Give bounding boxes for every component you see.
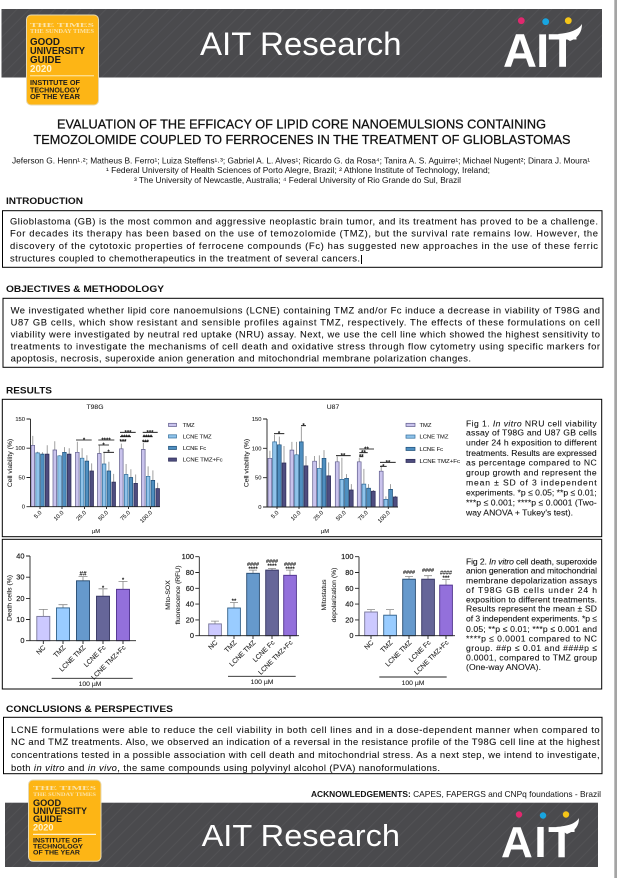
bar chart: U87: U87 xyxy=(327,404,339,411)
legend: T98G xyxy=(168,423,223,464)
bar chart: MitoSOX fluorescence: **** xyxy=(248,567,258,573)
bar chart: MitoSOX fluorescence: TMZ xyxy=(224,639,238,654)
bar chart: T98G: * xyxy=(107,450,110,456)
badge: Good University Guide (bottom): THE TIMES xyxy=(33,785,97,792)
bar chart: death cells: 30 xyxy=(16,573,24,582)
panel: objectives and methodology: treatments to investigate the mechanisms of cell death and oxidative stress through flow cytometry using specific markers for xyxy=(11,341,600,352)
panel: figure 2 xyxy=(2,539,602,689)
badge: Good University Guide (top): OF THE YEAR xyxy=(30,94,80,101)
bar chart: MitoSOX fluorescence: LCNE TMZ xyxy=(229,639,257,668)
badge: Good University Guide (bottom): GUIDE xyxy=(33,814,62,824)
panel: objectives and methodology xyxy=(3,298,603,367)
bar chart: mitostatus depolarization: 40 xyxy=(345,600,354,609)
figure 2 caption: (One-way ANOVA). xyxy=(466,662,541,672)
badge: Good University Guide (bottom): THE SUNDAY TIMES xyxy=(33,792,96,798)
badge: Good University Guide (top): UNIVERSITY xyxy=(30,46,85,57)
figure 2 caption: ****p ≤ 0.0001 compared to NC xyxy=(466,634,597,644)
bar chart: MitoSOX fluorescence: #### xyxy=(266,559,278,565)
panel: conclusions and perspectives xyxy=(4,717,602,774)
bar chart: T98G: 0 xyxy=(22,505,25,511)
bar chart: U87: * xyxy=(382,464,385,470)
bar chart: mitostatus depolarization xyxy=(321,552,455,687)
heading: results: RESULTS xyxy=(6,385,52,395)
bar chart: mitostatus depolarization: 0 xyxy=(349,631,354,640)
bar chart: T98G: *** xyxy=(142,440,150,446)
badge: Good University Guide (top): TECHNOLOGY xyxy=(30,87,80,94)
bar chart: U87: µM xyxy=(321,529,329,535)
footer banner xyxy=(5,803,598,867)
badge: Good University Guide (bottom): TECHNOLOGY xyxy=(33,844,84,850)
bar chart: U87: ** xyxy=(364,447,369,453)
badge: Good University Guide (top): INSTITUTE OF xyxy=(30,80,81,87)
bar chart: mitostatus depolarization: 80 xyxy=(345,568,354,577)
footer banner title: AIT Research xyxy=(202,818,400,853)
bar chart: U87: ** xyxy=(341,454,346,460)
legend: U87: TMZ xyxy=(420,423,432,429)
bar chart: mitostatus depolarization: *** xyxy=(442,576,450,582)
panel: objectives and methodology: We investigated whether lipid core nanoemulsions (LCNE) containing TMZ and/or Fc induce a decrease in viability of T98G and xyxy=(11,304,600,315)
badge: Good University Guide (top) xyxy=(26,15,98,105)
figure 1 caption: Fig 1. In vitro NRU cell viability xyxy=(466,418,597,428)
banner title: AIT Research xyxy=(200,26,402,62)
panel: conclusions and perspectives: LCNE formulations were able to reduce the cell viability in both cell lines and in a dose-dependent manner when compared to xyxy=(11,724,600,735)
bar chart: U87: 75.0 xyxy=(357,510,370,522)
bar chart: mitostatus depolarization: Mitostatus xyxy=(321,579,328,610)
bar chart: death cells: TMZ xyxy=(53,644,67,659)
authors and affiliations: ¹ Federal University of Health Sciences of Porto Alegre, Brazil; ² Athlone Institute of Technology, Ireland; xyxy=(106,166,490,175)
bar chart: MitoSOX fluorescence: ** xyxy=(232,599,237,605)
bar chart: U87: 150 xyxy=(252,417,262,423)
bar chart: MitoSOX fluorescence: 100 µM xyxy=(251,679,274,686)
bar chart: death cells: LCNE TMZ xyxy=(59,644,87,673)
bar chart: death cells: 10 xyxy=(16,615,24,624)
bar chart: U87: Cell viability (%) xyxy=(244,439,250,487)
bar chart: mitostatus depolarization: LCNE TMZ+Fc xyxy=(413,639,451,677)
bar chart: death cells: 100 µM xyxy=(79,681,102,688)
bar chart: U87: ** xyxy=(386,460,391,466)
bar chart: mitostatus depolarization: #### xyxy=(403,570,415,576)
bar chart: T98G: 25.0 xyxy=(76,510,88,522)
bar chart: T98G: 150 xyxy=(15,417,25,423)
bar chart: death cells: 40 xyxy=(16,552,24,560)
bar chart: T98G: µM xyxy=(92,529,100,535)
bar chart: mitostatus depolarization: 20 xyxy=(345,615,354,624)
bar chart: U87: ** xyxy=(361,451,366,457)
bar chart: T98G: T98G xyxy=(86,404,104,411)
figure 1 caption: mean ± SD of 3 independent xyxy=(466,477,597,487)
badge: Good University Guide (bottom): GOOD xyxy=(33,798,61,808)
legend: T98G: LCNE TMZ xyxy=(183,434,212,440)
title: TEMOZOLOMIDE COUPLED TO FERROCENES IN THE TREATMENT OF GLIOBLASTOMAS xyxy=(34,133,570,147)
bar chart: U87: ** xyxy=(359,455,364,461)
figure 1 caption: ***p ≤ 0.001; ****p ≤ 0.0001 (Two- xyxy=(466,497,597,507)
bar chart: mitostatus depolarization: 100 µM xyxy=(402,680,425,687)
bar chart: MitoSOX fluorescence: LCNE TMZ+Fc xyxy=(257,639,295,677)
bar chart: T98G: **** xyxy=(121,435,131,441)
bar chart: mitostatus depolarization: #### xyxy=(422,568,434,574)
authors and affiliations xyxy=(12,156,590,185)
badge: Good University Guide (bottom): OF THE YEAR xyxy=(33,850,80,856)
heading: objectives and methodology: OBJECTIVES & METHODOLOGY xyxy=(6,284,164,294)
bar chart: MitoSOX fluorescence xyxy=(165,552,299,686)
figure 2 caption: 0.05; **p ≤ 0.01; ***p ≤ 0.001 and xyxy=(466,624,597,634)
bar chart: U87: 5.0 xyxy=(270,510,280,520)
bar chart: MitoSOX fluorescence: 80 xyxy=(186,568,194,577)
bar chart: MitoSOX fluorescence: 100 xyxy=(182,552,194,561)
bar chart: U87: * xyxy=(278,432,281,438)
bar chart: mitostatus depolarization: LCNE Fc xyxy=(408,639,433,664)
bar chart: death cells: * xyxy=(102,586,105,592)
badge: Good University Guide (top): GUIDE xyxy=(30,55,61,66)
acknowledgements: ACKNOWLEDGEMENTS: CAPES, FAPERGS and CNPq foundations - Brazil xyxy=(311,790,601,799)
panel: introduction: discovery of the cytotoxic properties of ferrocene compounds (Fc) has suggested new approaches in the use of these ferric xyxy=(10,240,598,251)
legend: T98G: TMZ xyxy=(183,423,195,429)
bar chart: T98G: *** xyxy=(119,440,127,446)
figure 1 caption: as percentage compared to NC xyxy=(466,457,597,467)
figure 2 caption xyxy=(466,557,597,672)
figure 2 caption: Results represent the mean ± SD xyxy=(466,604,597,614)
bar chart: MitoSOX fluorescence: 40 xyxy=(186,600,194,609)
bar chart: mitostatus depolarization: 100 xyxy=(341,552,354,561)
bar chart: mitostatus depolarization: 60 xyxy=(345,584,354,593)
figure 2 caption: anion generation and mitochondrial xyxy=(466,566,597,576)
bar chart: MitoSOX fluorescence: NC xyxy=(208,639,219,651)
title xyxy=(34,118,570,147)
legend: U87 xyxy=(406,423,460,465)
panel: conclusions and perspectives: NC and TMZ treatments. Also, we observed an indication of a reversal in the resistance profile of the T98G cell line at the highest xyxy=(11,736,600,747)
bar chart: T98G: * xyxy=(102,443,105,449)
bar chart: death cells: * xyxy=(122,578,125,584)
bar chart: mitostatus depolarization: TMZ xyxy=(380,639,394,654)
bar chart: T98G: * xyxy=(83,438,86,444)
bar chart: T98G: Cell viability (%) xyxy=(7,439,14,487)
bar chart: MitoSOX fluorescence: #### xyxy=(284,562,296,568)
figure 1 caption xyxy=(465,418,597,517)
bar chart: U87: 50 xyxy=(255,476,262,482)
panel: introduction: Glioblastoma (GB) is the most common and aggressive neoplastic brain tumor, and its treatment has proved to be a challenge. xyxy=(10,215,598,226)
panel: introduction: For decades its therapy has been based on the use of temozolomide (TMZ), but the survival rate remains low. However, the xyxy=(10,228,598,239)
panel: introduction: structures coupled to chemotherapeutics in the treatment of several cancers. xyxy=(10,252,360,263)
panel: objectives and methodology: U87 GB cells, which show resistant and sensible profiles against TMZ, respectively. The effects of these formulations on cell xyxy=(11,316,600,327)
figure 2 caption: membrane depolarization assays xyxy=(466,575,597,585)
figure 2 caption: of T98G GB cells under 24 h xyxy=(466,585,597,595)
bar chart: T98G: **** xyxy=(101,438,111,444)
figure 1 caption: under 24 h exposition to different xyxy=(466,438,597,448)
bar chart: death cells: LCNE Fc xyxy=(83,644,108,669)
bar chart: death cells: ## xyxy=(79,570,87,578)
bar chart: death cells: 0 xyxy=(20,636,24,645)
icon: AIT logo (footer): AIT xyxy=(501,818,575,867)
bar chart: MitoSOX fluorescence: #### xyxy=(247,562,259,568)
panel: objectives and methodology: viability were investigated by neutral red uptake (NRU) assay. Next, we use the cell line which showed the highest sensitivity to xyxy=(11,329,600,340)
badge: Good University Guide (bottom): UNIVERSITY xyxy=(33,806,87,816)
bar chart: U87: * xyxy=(302,424,305,430)
legend: T98G: LCNE TMZ+Fc xyxy=(183,458,223,464)
bar chart: T98G: 10.0 xyxy=(53,510,65,522)
panel: introduction xyxy=(2,211,602,267)
bar chart: MitoSOX fluorescence: Mito-SOX xyxy=(165,580,172,610)
figure 2 caption: Fig 2. In vitro cell death, superoxide xyxy=(466,557,597,567)
bar chart: MitoSOX fluorescence: 60 xyxy=(186,584,194,593)
header banner xyxy=(2,9,602,78)
bar chart: U87: 50.0 xyxy=(335,510,348,522)
bar chart: mitostatus depolarization: #### xyxy=(440,570,452,576)
panel: conclusions and perspectives: concentrations tested in a possible association with cell death and mitochondrial stress. As a next step, we intend to investigate, xyxy=(11,749,600,760)
figure 2 caption: of 3 independent experiments. *p ≤ xyxy=(466,613,597,623)
legend: U87: LCNE TMZ xyxy=(420,434,449,440)
bar chart: death cells: 20 xyxy=(16,594,24,603)
bar chart: U87: 100.0 xyxy=(377,510,392,525)
bar chart: mitostatus depolarization: LCNE TMZ xyxy=(385,639,413,668)
bar chart: U87: 25.0 xyxy=(313,510,325,522)
heading: conclusions and perspectives: CONCLUSIONS & PERSPECTIVES xyxy=(6,704,173,714)
title: EVALUATION OF THE EFFICACY OF LIPID CORE NANOEMULSIONS CONTAINING xyxy=(57,118,546,132)
bar chart: MitoSOX fluorescence: 0 xyxy=(190,631,194,640)
badge: Good University Guide (top): THE TIMES xyxy=(30,22,95,29)
panel: figure 1 xyxy=(2,399,602,537)
icon: AIT logo: AIT xyxy=(503,24,577,77)
bar chart: death cells: LCNE TMZ+Fc xyxy=(90,644,128,682)
figure 1 caption: group growth and represent the xyxy=(466,467,597,477)
bar chart: T98G: 50 xyxy=(19,476,25,482)
figure 1 caption: treatments. Results are expressed xyxy=(466,448,597,458)
bar chart: death cells: Death cells (%) xyxy=(6,575,14,621)
badge: Good University Guide (bottom) xyxy=(28,780,101,861)
badge: Good University Guide (bottom): INSTITUTE OF xyxy=(33,838,82,844)
bar chart: U87: 10.0 xyxy=(290,510,302,522)
figure 2 caption: exposition to different treatments. xyxy=(466,594,597,604)
bar chart: T98G: *** xyxy=(124,430,132,436)
bar chart: T98G: 100.0 xyxy=(139,510,154,525)
authors and affiliations: ³ The University of Newcastle, Australia; ⁴ Federal University of Rio Grande do Sul, Brazil xyxy=(134,176,461,185)
bar chart: MitoSOX fluorescence: **** xyxy=(267,564,277,570)
figure 1 caption: way ANOVA + Tukey's test). xyxy=(465,507,573,517)
bar chart: death cells: NC xyxy=(36,644,47,656)
heading: introduction: INTRODUCTION xyxy=(6,196,83,206)
panel: objectives and methodology: apoptosis, necrosis, superoxide anion generation and mitochondrial membrane polarization changes. xyxy=(11,353,471,364)
badge: Good University Guide (top): 2020 xyxy=(30,64,52,75)
bar chart: U87: 100 xyxy=(252,446,262,452)
bar chart: MitoSOX fluorescence: **** xyxy=(285,567,295,573)
badge: Good University Guide (top): THE SUNDAY TIMES xyxy=(30,29,94,35)
badge: Good University Guide (top): GOOD xyxy=(30,37,60,48)
bar chart: mitostatus depolarization: NC xyxy=(364,639,375,651)
bar chart: T98G: **** xyxy=(143,435,153,441)
authors and affiliations: Jeferson G. Henn¹˒²; Matheus B. Ferro¹; Luiza Steffens¹˒³; Gabriel A. L. Alves¹; Ricardo G. da Rosa⁴; Tanira A. S. Aguirre¹; Michael Nugent²; Dinara J. Moura¹ xyxy=(12,156,590,166)
figure 2 caption: group. ##p ≤ 0.01 and ####p ≤ xyxy=(466,643,597,653)
bar chart: MitoSOX fluorescence: LCNE Fc xyxy=(252,639,277,664)
bar chart: mitostatus depolarization: depolarization (%) xyxy=(331,568,338,622)
bar chart: T98G: *** xyxy=(146,430,154,436)
figure 2 caption: 0.0001, compared to TMZ group xyxy=(466,653,597,663)
bar chart: T98G: 100 xyxy=(15,446,25,452)
bar chart: MitoSOX fluorescence: fluorescence (RFU) xyxy=(175,566,182,624)
legend: T98G: LCNE Fc xyxy=(183,446,206,452)
bar chart: T98G: 75.0 xyxy=(120,510,132,522)
figure 1 caption: experiments. *p ≤ 0.05; **p ≤ 0.01; xyxy=(466,488,597,498)
badge: Good University Guide (bottom): 2020 xyxy=(33,823,53,833)
bar chart: death cells xyxy=(6,552,136,688)
bar chart: T98G: 5.0 xyxy=(33,510,43,520)
panel: conclusions and perspectives: both in vitro and in vivo, the same compounds using polyvinyl alcohol (PVA) nanoformulations. xyxy=(11,762,440,773)
bar chart: U87 xyxy=(244,404,398,535)
bar chart: MitoSOX fluorescence: 20 xyxy=(186,615,194,624)
legend: U87: LCNE Fc xyxy=(420,447,443,453)
bar chart: T98G: 50.0 xyxy=(98,510,110,522)
figure 1 caption: assay of T98G and U87 GB cells xyxy=(466,428,597,438)
bar chart: U87: 0 xyxy=(258,505,262,511)
legend: U87: LCNE TMZ+Fc xyxy=(420,459,460,465)
bar chart: T98G xyxy=(7,404,160,535)
